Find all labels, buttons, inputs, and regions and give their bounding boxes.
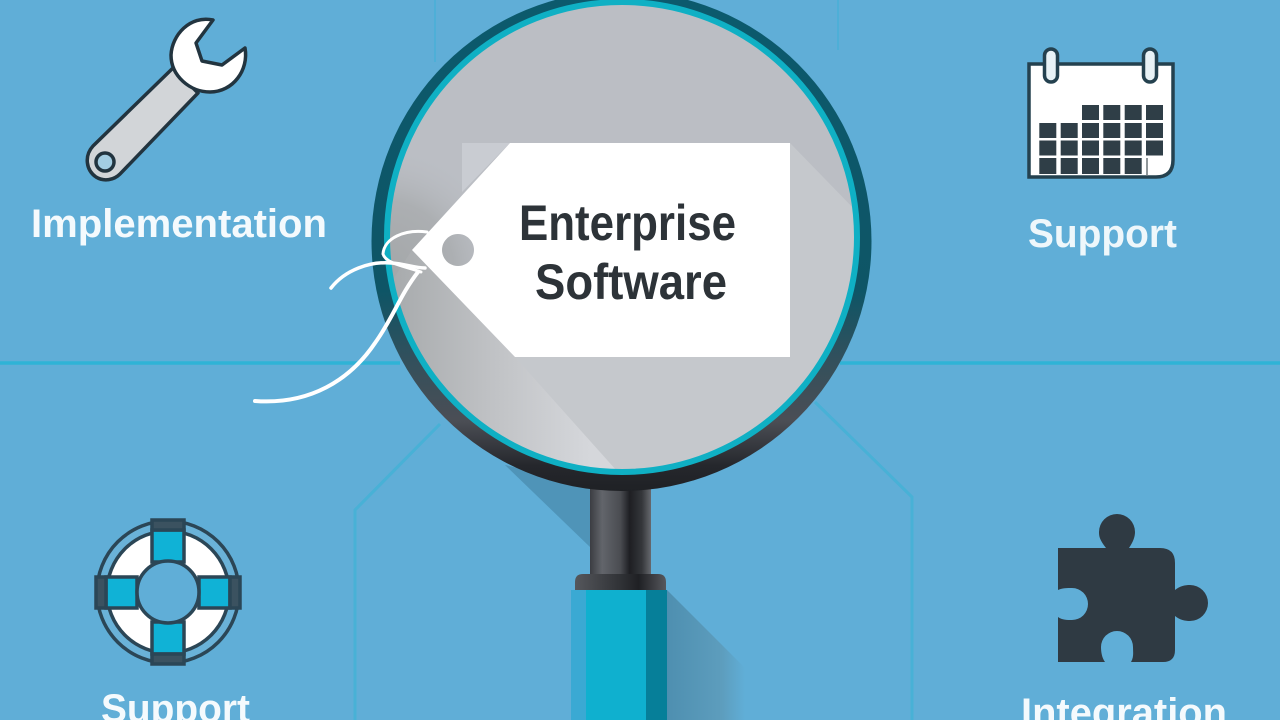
price tag	[412, 143, 790, 357]
item: support lifebuoy	[96, 520, 250, 720]
tag label: Enterprise	[519, 195, 736, 251]
lens rim	[372, 0, 872, 491]
tag body	[412, 143, 790, 357]
item: integration	[1021, 514, 1227, 720]
item: support calendar	[1028, 49, 1177, 256]
handle collar	[575, 574, 666, 591]
icon: puzzle piece	[1058, 514, 1208, 662]
handle neck	[590, 478, 651, 578]
tag label: Software	[535, 254, 727, 310]
teal handle	[571, 590, 667, 720]
icon: wrench	[87, 19, 246, 180]
tag string	[255, 231, 427, 401]
item: implementation	[31, 19, 327, 246]
teal lens ring	[387, 2, 857, 472]
magnifying glass	[372, 0, 872, 720]
icon: lifebuoy	[96, 520, 240, 664]
tag label	[519, 195, 736, 310]
long shadows of the handle	[505, 465, 745, 720]
lens glass	[380, 0, 870, 480]
icon: calendar	[1029, 49, 1173, 177]
label: implementation: Implementation	[31, 202, 327, 246]
label: support: Support	[1028, 212, 1177, 256]
